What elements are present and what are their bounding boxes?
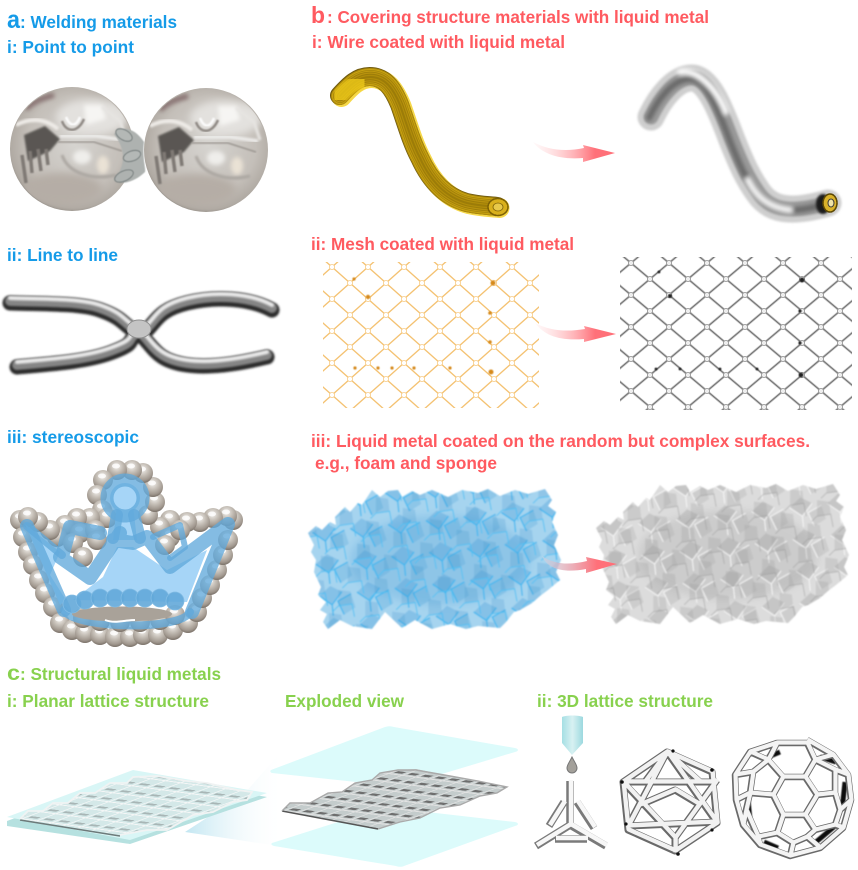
heading: a welding materials: : Welding materials [20, 12, 177, 32]
mesh rust spots [352, 277, 496, 374]
subheading: stereoscopic: iii: stereoscopic [7, 427, 139, 447]
translucent blue fill [25, 483, 207, 605]
illustration: silver mesh [620, 257, 852, 410]
bottom glass plate [271, 807, 518, 867]
arrow: wire to coated wire [533, 142, 615, 162]
wire start highlight [339, 82, 360, 97]
top glass plate [270, 726, 518, 787]
illustration: gold wire [339, 76, 508, 216]
exposed gold core [823, 194, 837, 212]
illustration: fullerene lattice [735, 740, 852, 856]
coated wire dark end [816, 194, 830, 214]
illustration: exploded view [270, 726, 518, 867]
heading: a welding materials [7, 6, 177, 34]
tetrahedron struts [536, 781, 606, 846]
heading: b covering structure materials: : Covering structure materials with liquid metal [327, 7, 709, 27]
subheading: point to point: i: Point to point [7, 37, 134, 57]
illustration: crown of beads with blue template [10, 460, 243, 647]
glass slab [7, 774, 267, 844]
arrow: foam to coated foam [542, 556, 617, 573]
subheading: mesh coated: ii: Mesh coated with liquid metal [311, 234, 574, 254]
droplet [567, 757, 577, 773]
heading: c structural liquid metals: c [7, 662, 20, 685]
translucent blue outline [27, 480, 228, 625]
arrow: gold mesh to coated mesh [535, 323, 616, 342]
illustration: silver coated wire [649, 72, 837, 214]
dark lattice [282, 769, 507, 829]
illustration: planar lattice on slab [7, 770, 267, 844]
subheading: complex surfaces: iii: Liquid metal coated on the random but complex surfaces. [311, 431, 810, 451]
heading: c structural liquid metals: : Structural liquid metals [20, 664, 221, 684]
lattice [20, 776, 252, 835]
nozzle [562, 716, 583, 755]
wire cut end [488, 198, 508, 216]
subheading: wire coated: i: Wire coated with liquid metal [312, 32, 565, 52]
subheading: exploded view: Exploded view [285, 691, 405, 711]
illustration: printing nozzle and tetrahedron [536, 716, 607, 846]
strut end dots [620, 749, 714, 856]
illustration: crossed welded tubes [10, 294, 272, 367]
illustration: point to point welded spheres [10, 87, 268, 212]
weld joint [113, 126, 145, 185]
subheading: planar lattice: i: Planar lattice structure [7, 691, 209, 711]
front bead row in blue [63, 589, 184, 613]
illustration: gold mesh [323, 262, 539, 408]
illustration: blue foam [308, 489, 561, 629]
subheading: 3D lattice: ii: 3D lattice structure [537, 691, 713, 711]
inner shadows [748, 752, 845, 848]
mesh dark spots [655, 271, 804, 377]
illustration: icosahedron lattice [620, 749, 719, 856]
outer silver beads [10, 460, 243, 647]
projection beam between slab and exploded view [185, 730, 300, 848]
heading: b covering structure materials: b [311, 2, 325, 28]
subheading: line to line: ii: Line to line [7, 245, 118, 265]
bottom rim opening [72, 606, 172, 622]
weld node [127, 320, 151, 338]
illustration: silver foam [596, 484, 849, 624]
subheading: foam and sponge: e.g., foam and sponge [315, 453, 497, 473]
heading: a welding materials: a [7, 6, 21, 34]
